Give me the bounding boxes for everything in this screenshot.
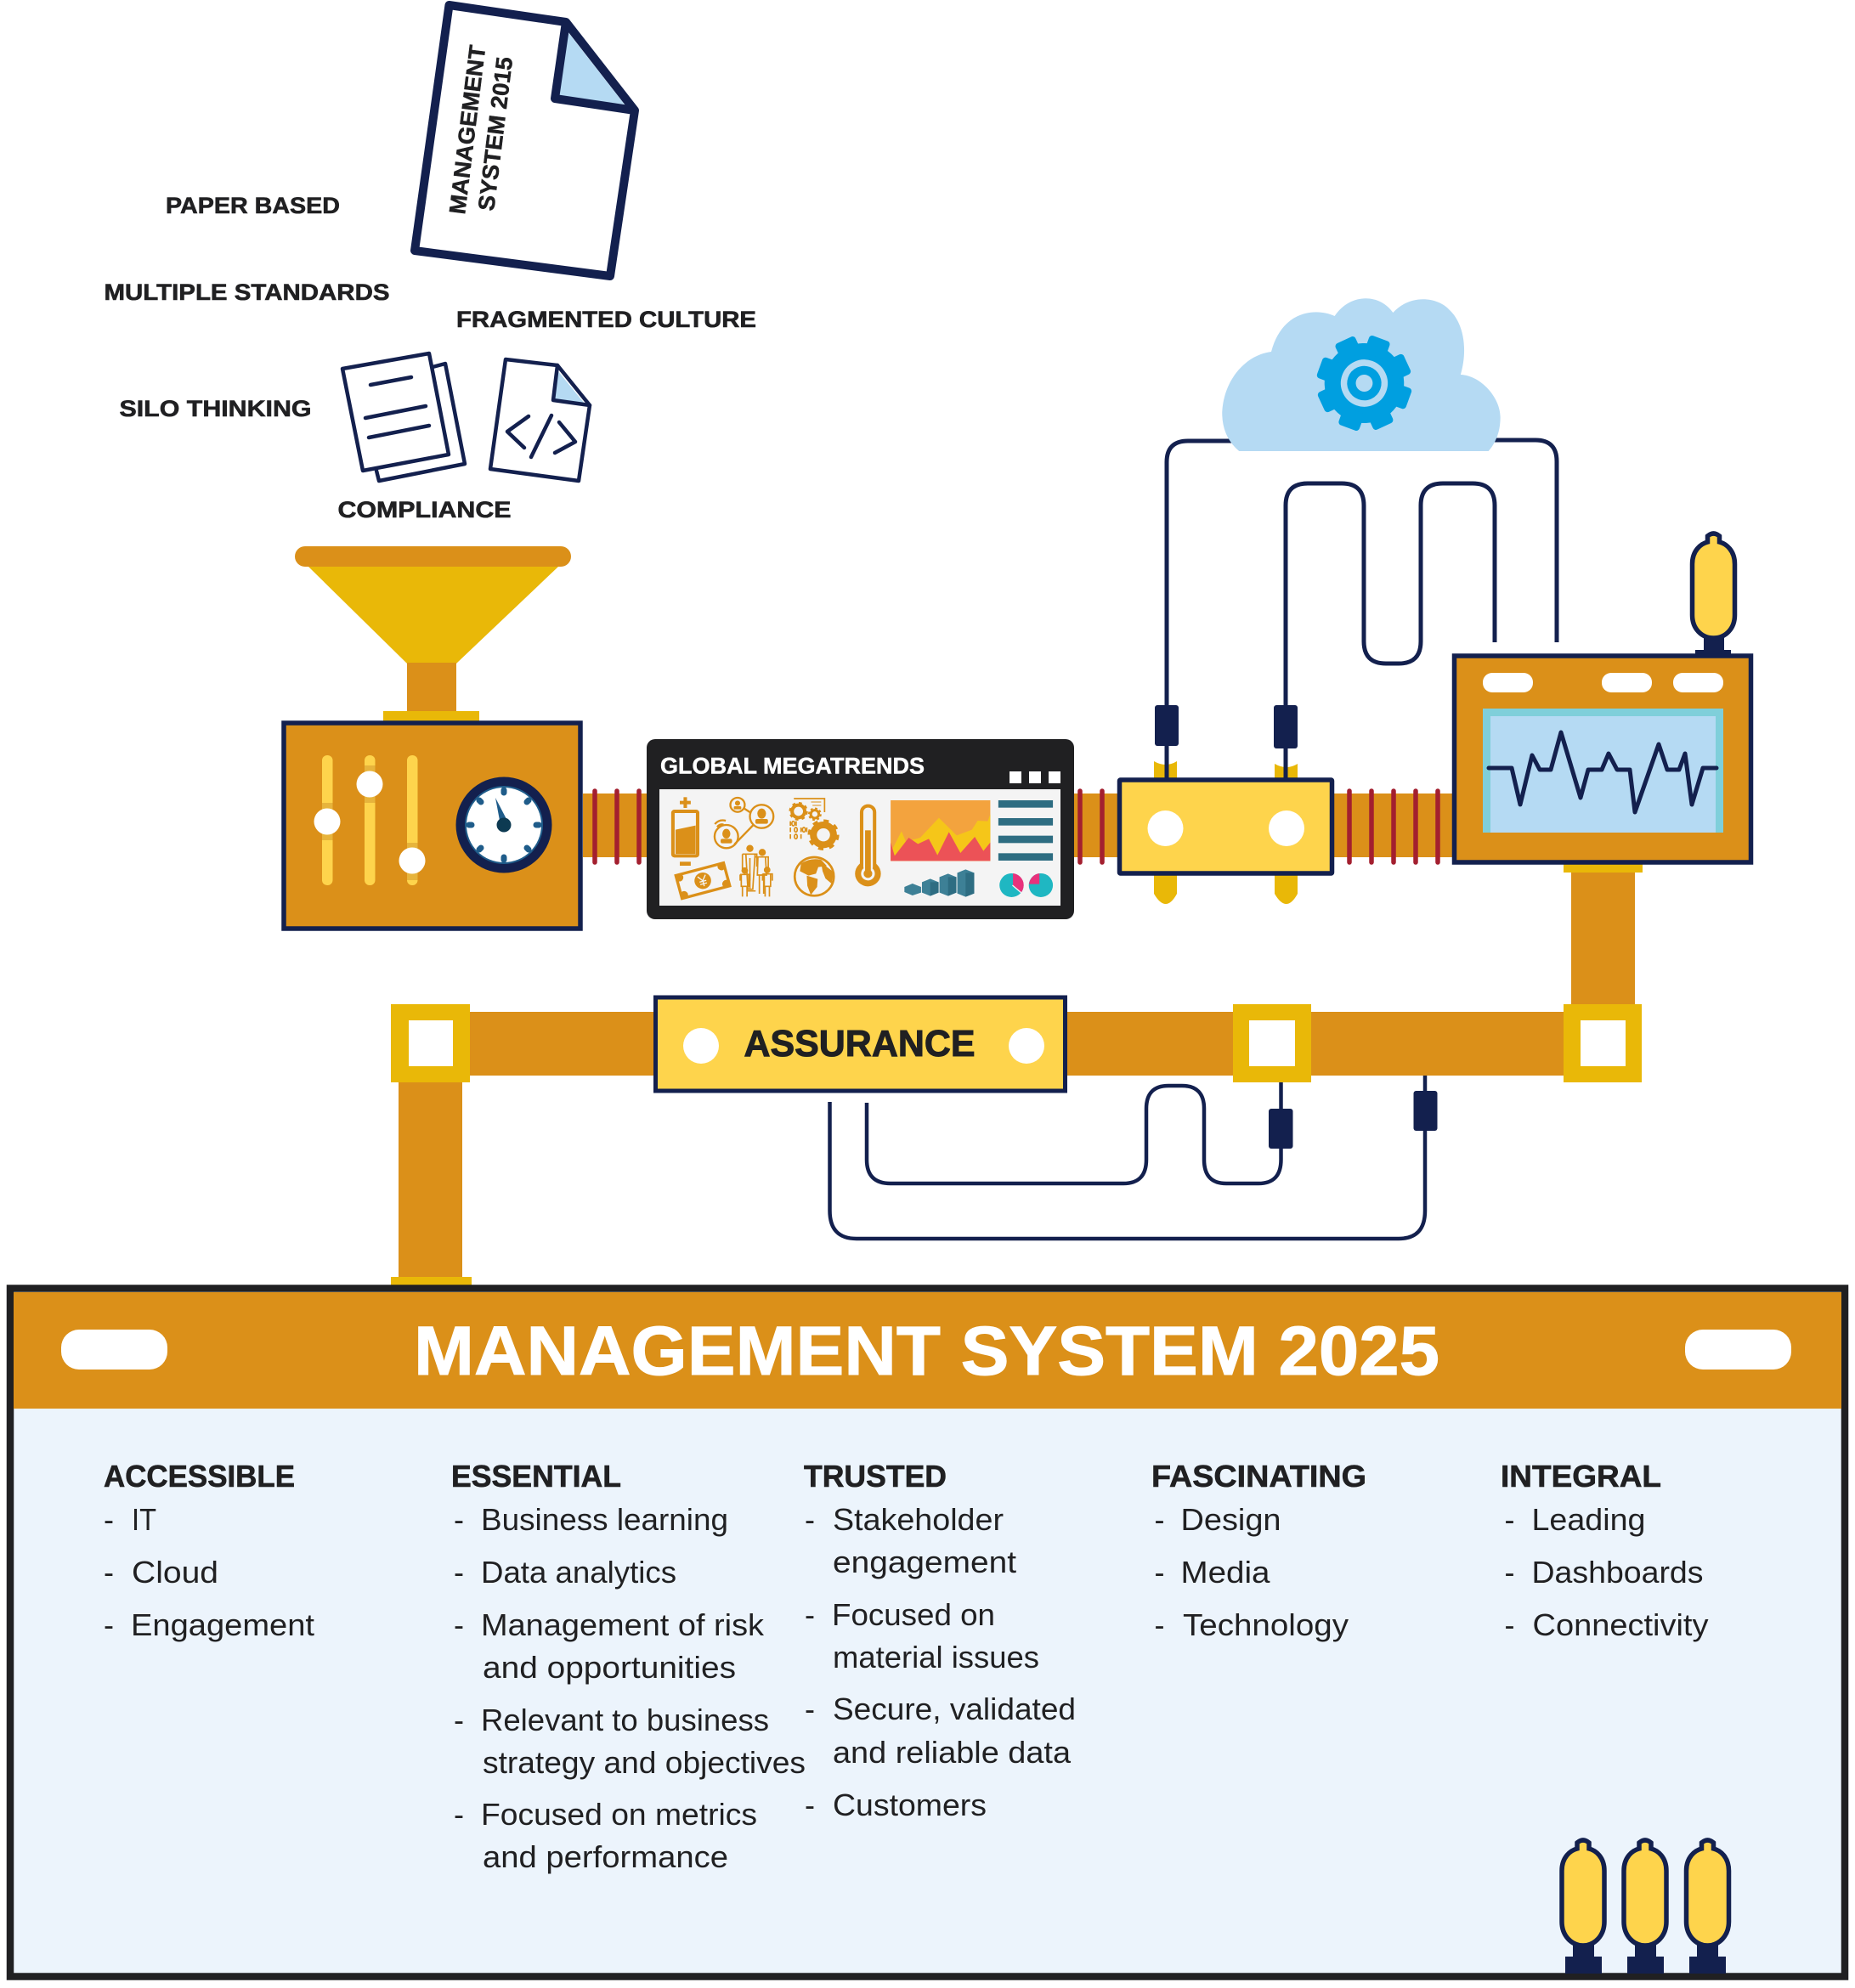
label: paper based: PAPER BASED [166,193,340,218]
cables from cloud [1167,440,1557,777]
gear [1278,297,1450,470]
assurance cables [829,1076,1438,1239]
monitor with pulse line [1455,656,1750,862]
label: compliance: COMPLIANCE [338,497,512,522]
document: management system 2015: MANAGEMENT [444,43,490,216]
column: integral: Dashboards [1531,1555,1703,1590]
assurance box: ASSURANCE [744,1023,976,1065]
connector box with pins [1120,705,1332,904]
column: trusted: Focused on [832,1597,995,1632]
column: accessible [104,1459,314,1642]
column: accessible: Engagement [131,1607,314,1642]
column: trusted: - [805,1597,815,1632]
column: trusted: - [805,1502,815,1537]
megatrend icons [673,797,1053,901]
column: integral: Connectivity [1533,1607,1708,1642]
column: integral: - [1504,1555,1514,1590]
column: accessible: Cloud [132,1555,218,1590]
column: accessible: - [104,1502,114,1537]
icon: code document [490,359,590,481]
label: multiple standards: MULTIPLE STANDARDS [104,280,389,305]
assurance box [656,997,1066,1091]
pulse line [1489,732,1716,812]
column: fascinating: - [1154,1555,1164,1590]
column: essential: strategy and objectives [483,1745,806,1780]
icon: cloud with gear [1222,297,1501,470]
icon: battery [673,797,698,866]
panel: management system 2025 [10,1288,1845,1976]
column: accessible: ACCESSIBLE [104,1459,295,1494]
main process pipe [583,791,1455,862]
icon: globe [795,857,834,895]
gauge [455,777,552,873]
column: essential: Relevant to business [481,1703,769,1737]
column: essential: - [454,1607,464,1642]
column: fascinating: - [1154,1502,1164,1537]
column: trusted: and reliable data [833,1735,1072,1770]
label: silo thinking: SILO THINKING [119,396,311,421]
icon: list lines [998,800,1053,861]
icon: stacked papers [342,353,465,481]
label: fragmented culture: FRAGMENTED CULTURE [456,307,756,332]
column: integral: - [1504,1607,1514,1642]
column: essential: Management of risk [481,1607,765,1642]
column: trusted: - [805,1691,815,1726]
chart: area chart [891,800,990,861]
icon: three pressure bulbs [1562,1840,1728,1974]
column: essential: Focused on metrics [481,1797,757,1832]
icon: family [740,845,772,896]
icon: gears and binary [790,799,838,849]
column: trusted: engagement [833,1545,1016,1579]
column: fascinating: - [1154,1607,1164,1642]
chart: 3d bars [904,869,974,897]
column: integral: - [1504,1502,1514,1537]
column: essential [451,1459,806,1874]
column: trusted: TRUSTED [804,1459,947,1494]
pressure bulb on monitor [1693,534,1735,655]
column: essential: - [454,1703,464,1737]
column: fascinating: FASCINATING [1151,1459,1366,1494]
column: integral: Leading [1531,1502,1645,1537]
column: fascinating: Technology [1183,1607,1349,1642]
column: fascinating [1151,1459,1366,1642]
chart: pie icons [999,873,1053,897]
column: accessible: IT [132,1502,156,1537]
document: management system 2015 [415,5,635,276]
return pipe with collars [391,1004,1642,1287]
panel: global megatrends: GLOBAL MEGATRENDS [660,753,925,778]
column: trusted: Customers [833,1788,987,1822]
sliders [314,755,425,885]
column: fascinating: Media [1181,1555,1271,1590]
column: essential: and opportunities [483,1650,736,1685]
icon: thermometer [855,805,881,886]
column: essential: - [454,1797,464,1832]
panel: global megatrends [647,739,1074,919]
column: essential: Data analytics [481,1555,676,1590]
column: accessible: - [104,1555,114,1590]
document: management system 2015: SYSTEM 2015 [473,55,517,212]
column: trusted: material issues [833,1640,1039,1675]
column: essential: Business learning [481,1502,728,1537]
icon: banknote [674,861,732,901]
column: trusted: - [805,1788,815,1822]
column: essential: ESSENTIAL [451,1459,621,1494]
vertical pipe right [1564,863,1643,1008]
column: essential: and performance [483,1839,728,1874]
control box with sliders and gauge [284,723,580,929]
column: essential: - [454,1502,464,1537]
column: fascinating: Design [1181,1502,1281,1537]
column: accessible: - [104,1607,114,1642]
column: integral [1501,1459,1708,1642]
header band [14,1292,1841,1409]
column: essential: - [454,1555,464,1590]
column: integral: INTEGRAL [1501,1459,1661,1494]
column: trusted: Secure, validated [833,1691,1076,1726]
column: trusted [804,1459,1076,1822]
icon: people network [715,798,773,848]
header band: MANAGEMENT SYSTEM 2025 [414,1313,1439,1390]
column: trusted: Stakeholder [833,1502,1004,1537]
funnel [295,546,571,721]
